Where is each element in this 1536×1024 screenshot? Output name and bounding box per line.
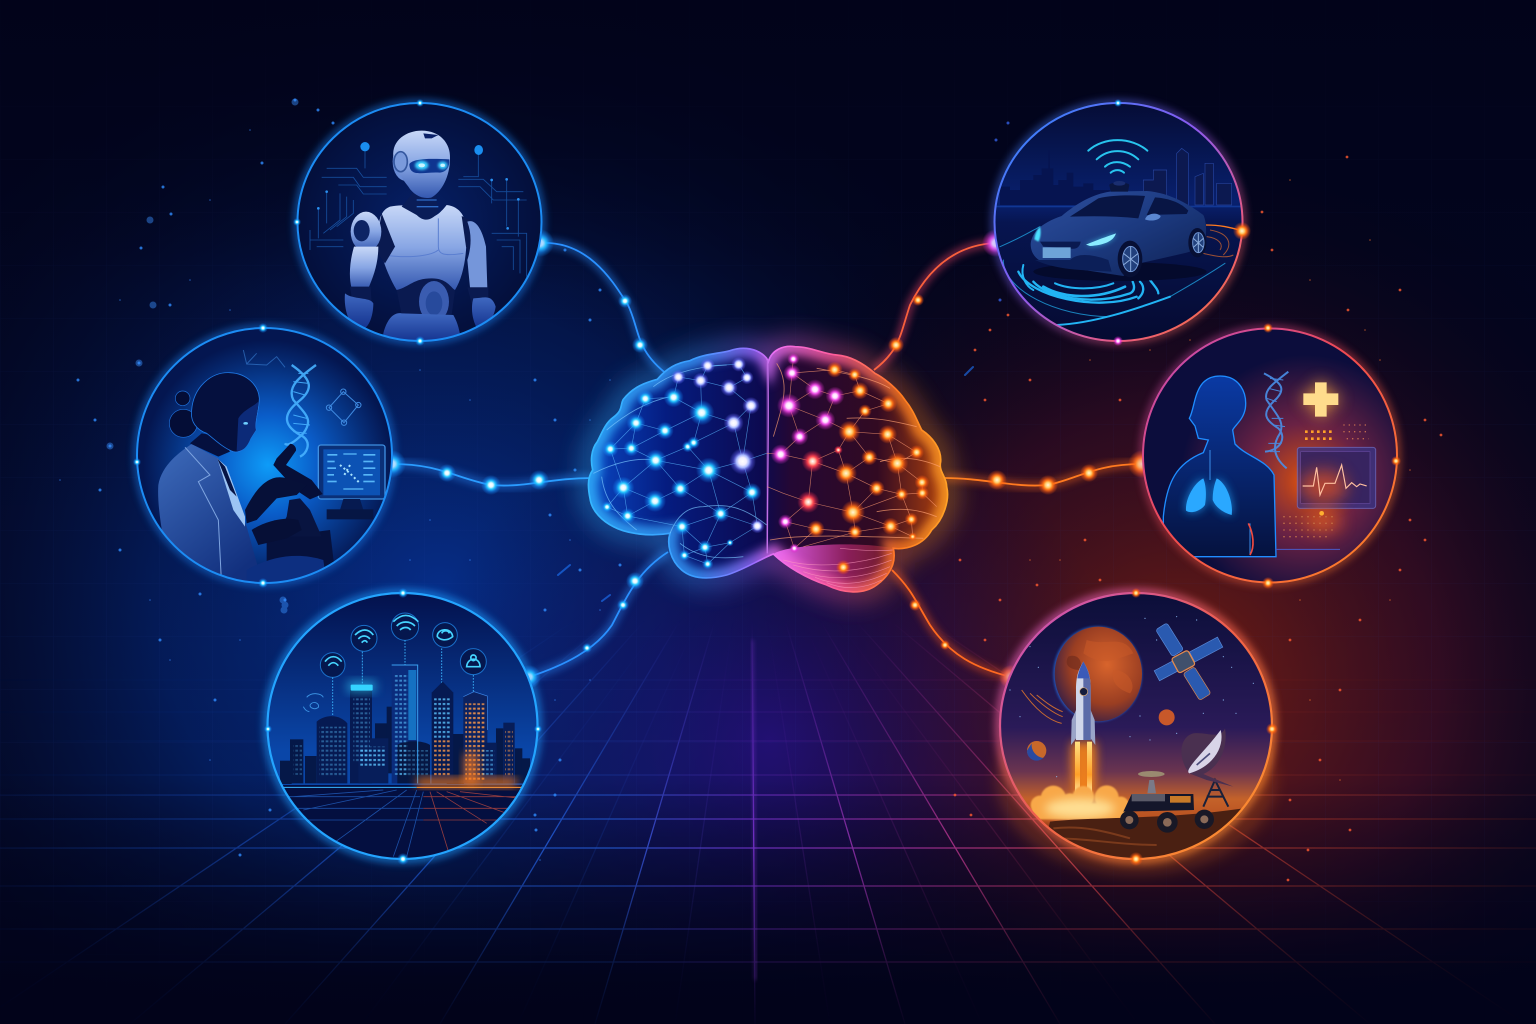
rocket <box>1076 662 1091 740</box>
brain midline and folds <box>593 360 940 558</box>
robot torso <box>378 205 467 290</box>
robot waist and hips <box>397 278 455 315</box>
rover <box>1120 771 1214 833</box>
horizon glow <box>283 784 527 790</box>
brain nodes, right orange <box>807 362 929 575</box>
robot head <box>392 156 404 181</box>
panel: medicine <box>1143 328 1397 582</box>
scientist coat <box>158 444 263 587</box>
smoke cloud <box>1031 785 1129 819</box>
panel: scientist <box>137 328 392 587</box>
cerebellum folds <box>783 548 893 588</box>
DNA helix <box>1264 372 1288 468</box>
panel: space <box>990 590 1280 865</box>
lab bench and microscope <box>266 530 334 567</box>
medical cross <box>1303 382 1338 417</box>
monitor <box>318 445 385 499</box>
connector: smart city to brain <box>517 552 668 689</box>
robot left arm <box>379 214 396 264</box>
roof sensor <box>1109 182 1129 192</box>
satellite <box>1153 623 1224 701</box>
ground perspective grid <box>287 790 520 857</box>
connector: robot to brain <box>526 229 668 375</box>
data dots <box>1305 432 1333 439</box>
circuit traces <box>310 147 527 277</box>
signal lines <box>333 640 473 718</box>
connector: medicine to brain <box>944 450 1156 495</box>
rocket flames <box>1071 742 1096 800</box>
scientist arm <box>245 477 300 524</box>
robot right arm <box>462 216 467 248</box>
skyline <box>1000 164 1110 205</box>
panel: robot <box>298 103 542 343</box>
DNA helix <box>285 365 316 457</box>
connector: space to brain <box>892 570 1023 689</box>
building windows <box>293 670 513 780</box>
back buildings <box>280 707 530 784</box>
wifi signal <box>1088 140 1147 173</box>
stars <box>1010 617 1253 777</box>
connector: car to brain <box>874 229 1010 370</box>
satellite dish <box>1181 728 1233 807</box>
planet Mars <box>1053 626 1142 722</box>
connector: scientist to brain <box>378 450 592 495</box>
panel: smart city <box>260 590 550 865</box>
brain nodes, right magenta <box>771 353 844 553</box>
lungs <box>1186 478 1232 515</box>
car headlights <box>1086 233 1116 246</box>
road light rings <box>1000 227 1225 325</box>
background particles <box>60 100 1441 880</box>
orbital debris <box>1022 690 1063 723</box>
ground <box>1040 808 1243 863</box>
lower data grid and bar <box>1305 510 1342 533</box>
scientist head and hair <box>169 409 197 437</box>
brain <box>588 346 948 592</box>
front buildings <box>316 682 515 784</box>
brain nodes, right red <box>797 446 843 513</box>
human figure <box>1163 376 1276 557</box>
car wheels <box>1118 241 1142 277</box>
brain nodes, left hemisphere <box>601 387 761 570</box>
panel: autonomous car <box>990 100 1251 345</box>
car body <box>1033 262 1207 281</box>
ECG monitor <box>1297 447 1376 508</box>
molecule diagrams <box>243 350 361 425</box>
brain synapse network <box>607 359 937 564</box>
network icons <box>320 613 486 677</box>
brain nodes, central white <box>671 357 765 533</box>
small planets <box>1027 741 1046 760</box>
ring accent sparks <box>133 99 1401 866</box>
